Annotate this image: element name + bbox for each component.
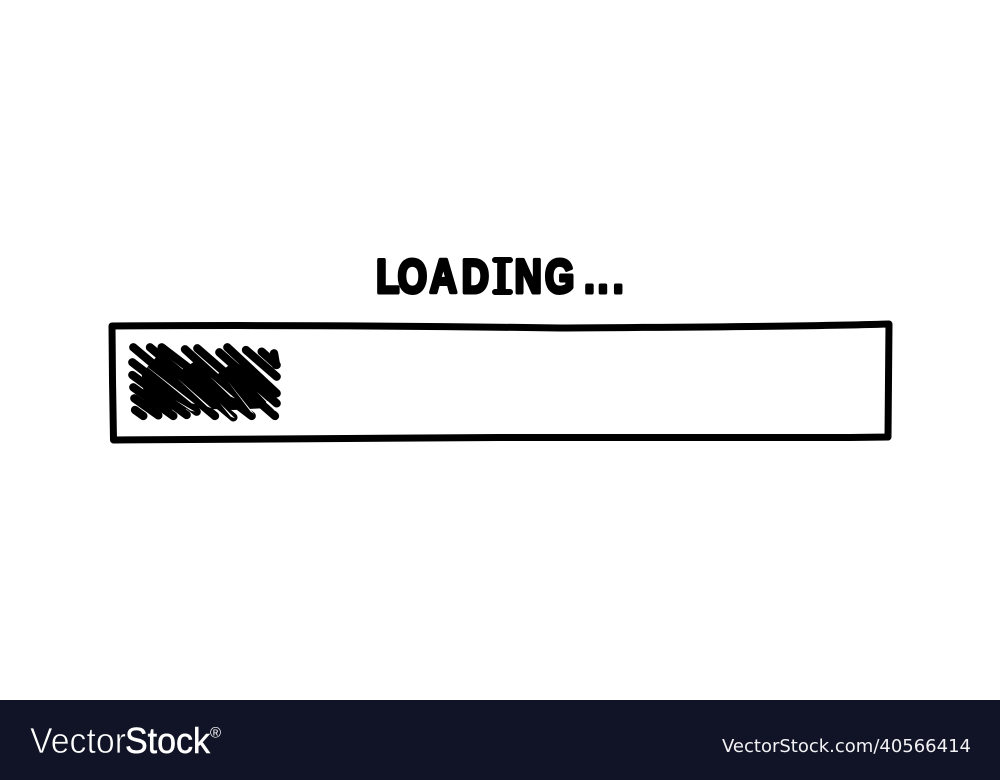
logo word: Stock: Stock	[125, 720, 211, 761]
footer image id: VectorStock.com/40566414	[722, 736, 971, 757]
footer logo: VectorStock	[30, 720, 221, 761]
progress bar outline	[112, 324, 889, 440]
footer bar	[0, 700, 1000, 780]
progress bar scribble fill	[132, 347, 278, 418]
scribble solid core	[142, 357, 270, 410]
logo word: Vector: Vector	[30, 720, 126, 761]
scribble white slivers	[139, 361, 278, 418]
logo registered mark: ®	[210, 724, 221, 742]
scribble strokes	[132, 347, 277, 417]
heading: LOADING...: LOADING...	[376, 251, 623, 304]
